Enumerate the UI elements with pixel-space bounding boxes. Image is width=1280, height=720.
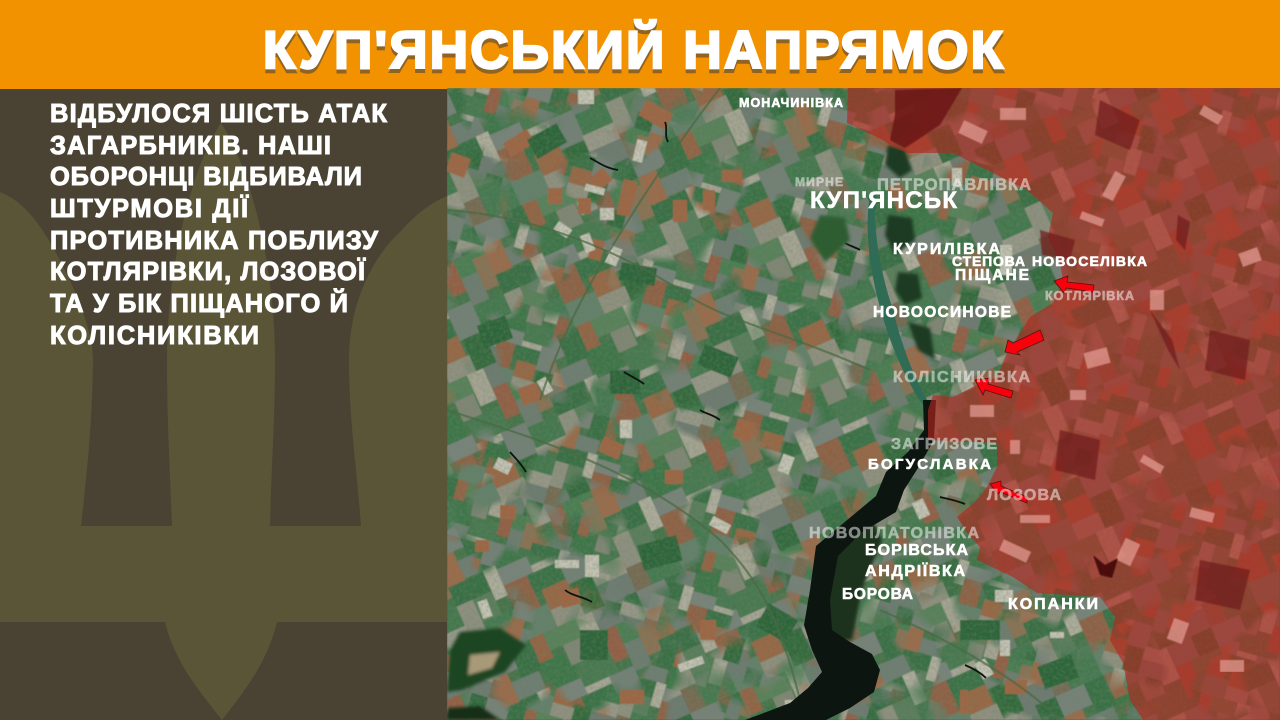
body text: ОБОРОНЦІ ВІДБИВАЛИ	[50, 163, 362, 191]
occupied territory overlay	[847, 88, 1280, 720]
river	[868, 195, 930, 408]
dark red forest	[890, 88, 962, 148]
body text: КОТЛЯРІВКИ, ЛОЗОВОЇ	[50, 258, 366, 286]
settlement labels: БОРІВСЬКА	[865, 542, 968, 559]
body text: ВІДБУЛОСЯ ШІСТЬ АТАК	[50, 100, 387, 128]
arrow: Лозова	[990, 481, 1027, 503]
title: КУП'ЯНСЬКИЙ НАПРЯМОК	[263, 19, 1004, 80]
settlement labels: КУП'ЯНСЬК	[810, 187, 957, 214]
body text	[50, 100, 387, 350]
body text: ПРОТИВНИКА ПОБЛИЗУ	[50, 227, 379, 255]
satellite map	[445, 88, 1280, 720]
body text: ШТУРМОВІ ДІЇ	[50, 195, 249, 223]
reservoir	[745, 400, 936, 720]
body text: ЗАГАРБНИКІВ. НАШІ	[50, 132, 331, 160]
settlement labels: НОВООСИНОВЕ	[873, 304, 1011, 321]
settlement labels: БОРОВА	[842, 586, 913, 603]
roads and gullies	[447, 88, 1060, 720]
body text: ТА У БІК ПІЩАНОГО Й	[50, 288, 348, 318]
settlement labels: МОНАЧИНІВКА	[739, 96, 843, 110]
settlement labels: КОПАНКИ	[1008, 596, 1098, 613]
settlement labels: МИРНЕ	[795, 175, 843, 189]
settlement labels: ПЕТРОПАВЛІВКА	[877, 176, 1031, 194]
arrow: Котлярівка	[1054, 276, 1094, 293]
header bar	[0, 0, 1280, 89]
settlement labels: ЛОЗОВА	[987, 487, 1061, 504]
settlement labels: БОГУСЛАВКА	[868, 456, 991, 473]
settlement labels: СТЕПОВА	[952, 253, 1025, 269]
arrow: Колісниківка	[975, 378, 1013, 398]
dark red reservoir east	[1093, 555, 1118, 578]
settlement labels: АНДРІЇВКА	[865, 562, 965, 580]
pink fields and dark patches in occupied zone	[958, 100, 1262, 672]
body text: КОЛІСНИКІВКИ	[50, 322, 259, 350]
arrow: south of Новоосинове	[1005, 330, 1044, 355]
settlement labels: НОВОПЛАТОНІВКА	[809, 525, 979, 542]
settlement labels	[739, 96, 1147, 613]
settlement labels: ЗАГРИЗОВЕ	[891, 436, 997, 453]
settlement labels: КОТЛЯРІВКА	[1045, 289, 1134, 303]
settlement labels: ПІЩАНЕ	[955, 267, 1029, 284]
left panel with trident emblem	[0, 89, 447, 720]
forests	[447, 145, 935, 720]
settlement labels: НОВОСЕЛІВКА	[1032, 253, 1147, 269]
hand-placed fields	[445, 90, 1079, 714]
settlement labels: КОЛІСНИКІВКА	[893, 369, 1030, 386]
settlement labels: КУРИЛІВКА	[893, 241, 1000, 258]
